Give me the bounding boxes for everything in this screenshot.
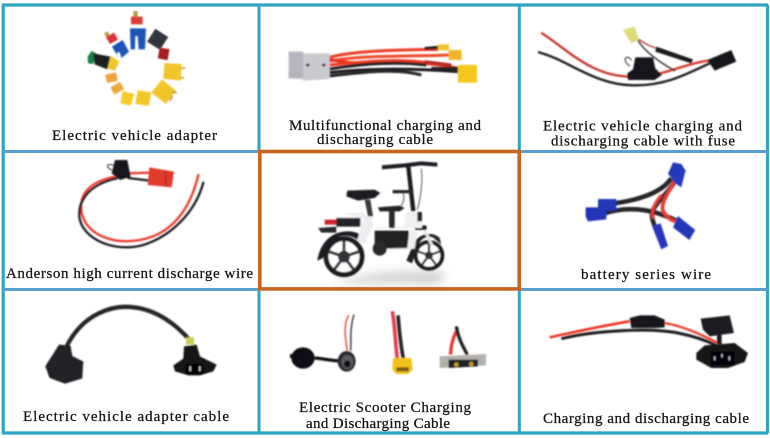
- icon: three charging connectors: [290, 311, 486, 374]
- frame: orange highlight: [260, 152, 519, 289]
- label: adapter cable: Electric vehicle adapter cable: [23, 409, 229, 425]
- label: charging and discharging cable: Charging and discharging cable: [543, 411, 749, 427]
- icon: shadow under bike: [335, 272, 445, 284]
- icon: electric bike: [317, 163, 442, 275]
- panel: battery series wire: [581, 162, 711, 283]
- handlebars and stem: [382, 163, 437, 228]
- saddles: [346, 190, 405, 228]
- panel: charging and discharging cable: [543, 315, 749, 427]
- icon: fused cable with socket: [550, 315, 748, 368]
- panel: scooter charging cable: and Discharging Cable: [306, 416, 450, 432]
- icon: multi-branch cable: [289, 44, 477, 83]
- panel: cable with fuse: [539, 27, 742, 149]
- frame: [357, 213, 432, 256]
- panel: scooter charging cable: [290, 311, 486, 432]
- rear wheel: [317, 231, 366, 275]
- label: Anderson discharge wire: Anderson high current discharge wire: [6, 266, 253, 282]
- panel: center e-bike: [260, 152, 519, 289]
- panel: adapter cable: [23, 307, 229, 425]
- panel: multifunctional cable: discharging cable: [317, 132, 433, 148]
- panel: electric vehicle adapter: [52, 11, 217, 144]
- label: battery series wire: battery series wire: [581, 267, 711, 283]
- rack and tail light: [318, 214, 366, 233]
- front wheel: [406, 234, 442, 269]
- icon: Anderson wire loop: [79, 160, 203, 247]
- label: scooter charging cable: Electric Scooter Charging: [299, 400, 472, 416]
- seat post: [365, 200, 373, 216]
- icon: series wire with blue connectors: [586, 162, 695, 249]
- label: multifunctional cable: Multifunctional charging and: [289, 118, 482, 134]
- panel: multifunctional cable: [289, 44, 482, 148]
- panel: Anderson discharge wire: [6, 160, 253, 282]
- panel: cable with fuse: discharging cable with fuse: [551, 134, 735, 150]
- label: electric vehicle adapter: Electric vehicle adapter: [52, 128, 217, 144]
- icon: black adapter cable: [46, 307, 217, 383]
- icon: fused cable: [539, 27, 736, 85]
- icon: ring of adapters: [88, 11, 185, 106]
- label: cable with fuse: Electric vehicle charging and: [543, 118, 742, 134]
